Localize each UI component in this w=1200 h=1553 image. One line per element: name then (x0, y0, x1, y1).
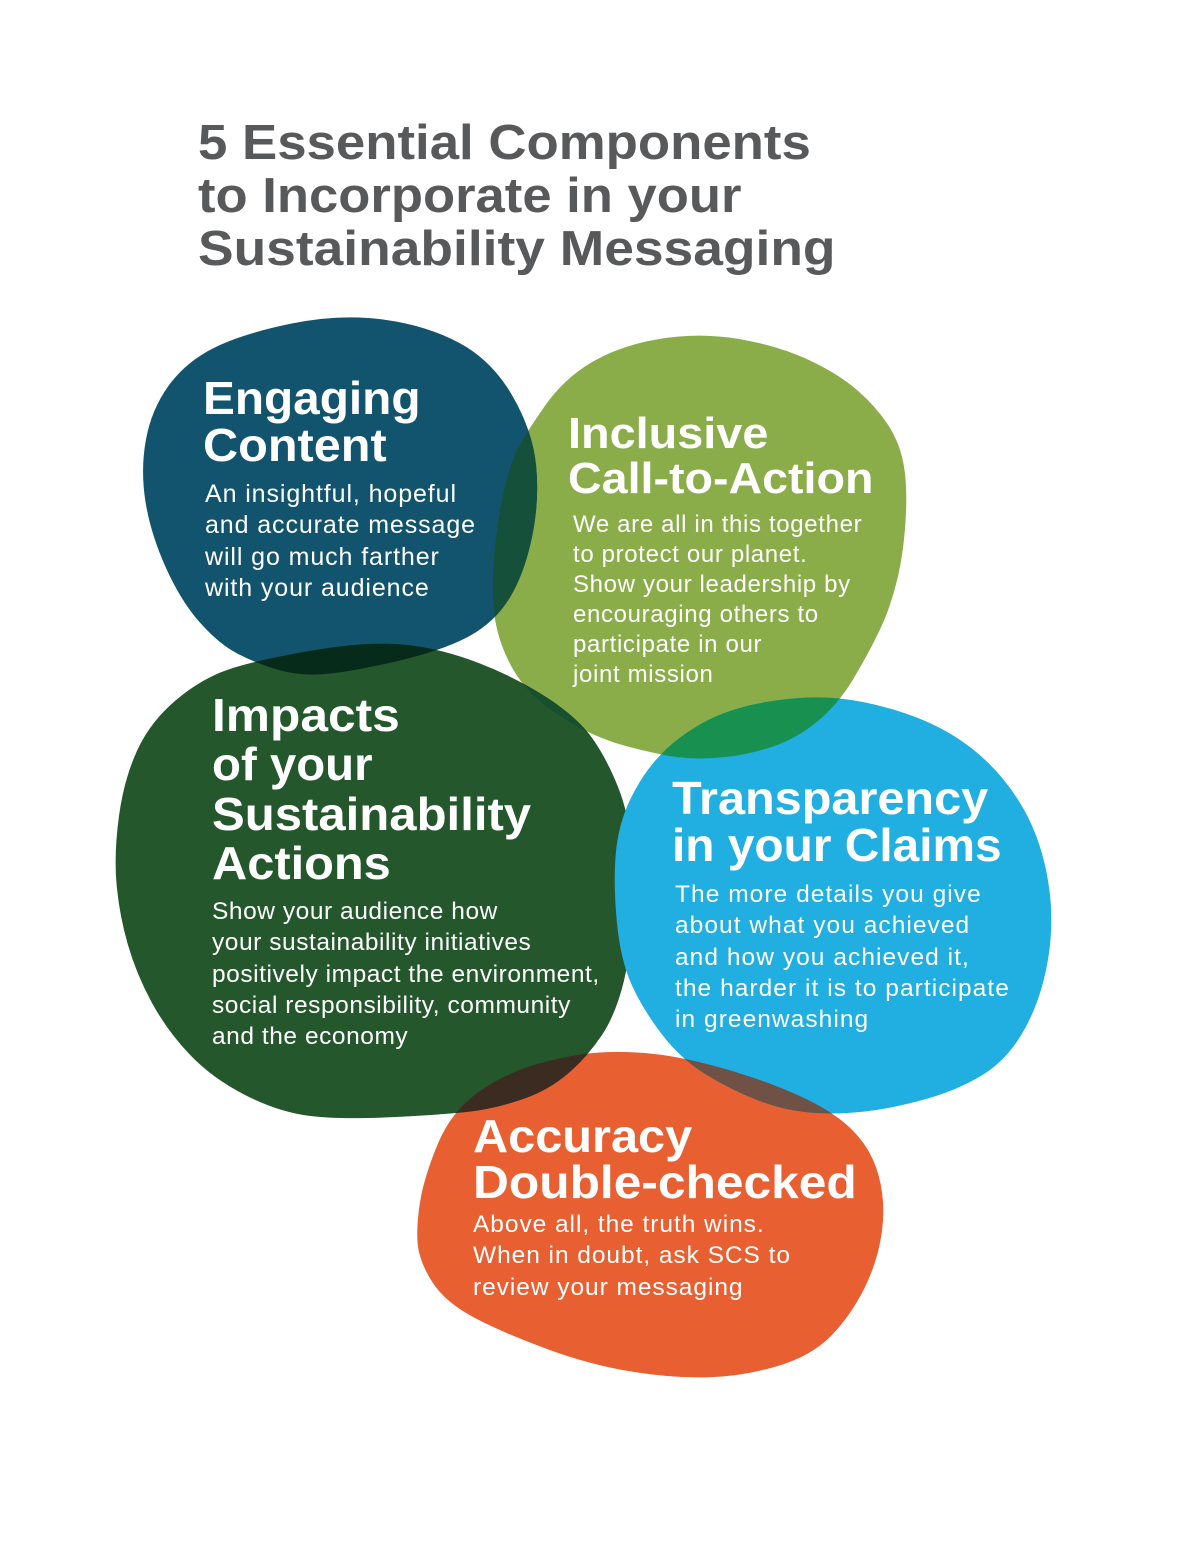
heading: transparency: Transparency (672, 772, 988, 824)
blob: accuracy (417, 1052, 883, 1377)
panel text: accuracy (473, 1110, 857, 1301)
heading: impacts: Actions (212, 837, 391, 889)
body: engaging content: An insightful, hopeful (205, 480, 457, 508)
body: inclusive call-to-action: We are all in this together (573, 511, 862, 538)
body: accuracy: Above all, the truth wins. (473, 1211, 765, 1238)
body: transparency: The more details you give (675, 881, 982, 908)
body: inclusive call-to-action (572, 511, 862, 688)
heading: accuracy: Accuracy (473, 1110, 692, 1162)
body: inclusive call-to-action: participate in our (573, 631, 762, 658)
body: inclusive call-to-action: Show your leadership by (573, 571, 851, 598)
overlap: inclusive and impacts (522, 683, 587, 732)
body: transparency: about what you achieved (675, 912, 970, 939)
heading: engaging content: Engaging (203, 372, 421, 424)
body: engaging content: with your audience (205, 574, 430, 602)
heading: engaging content: Content (203, 419, 387, 471)
title: to Incorporate in your (198, 168, 742, 223)
heading: inclusive call-to-action: Call-to-Action (568, 454, 873, 503)
overlap: inclusive and transparency (661, 697, 840, 758)
panel text: transparency (672, 772, 1010, 1033)
heading: transparency (672, 772, 1002, 871)
body: engaging content (205, 480, 476, 602)
heading: accuracy: Double-checked (473, 1156, 857, 1208)
body: inclusive call-to-action: encouraging others to (573, 601, 819, 628)
title: Sustainability Messaging (198, 221, 836, 276)
heading: inclusive call-to-action (568, 409, 873, 503)
body: inclusive call-to-action: to protect our planet. (573, 541, 807, 568)
blobs (116, 317, 1052, 1378)
body: transparency: and how you achieved it, (675, 944, 970, 971)
body: transparency: the harder it is to participate (675, 975, 1010, 1002)
body: impacts: social responsibility, community (212, 992, 571, 1019)
body: impacts: positively impact the environment, (212, 961, 600, 988)
heading: accuracy (473, 1110, 857, 1208)
body: accuracy (473, 1211, 791, 1301)
heading: impacts: Sustainability (212, 788, 531, 840)
panel text: impacts (212, 689, 600, 1050)
body: impacts: Show your audience how (212, 898, 498, 925)
body: transparency: in greenwashing (675, 1006, 869, 1033)
panel text: engaging content (203, 372, 476, 602)
body: engaging content: and accurate message (205, 511, 476, 539)
body: accuracy: When in doubt, ask SCS to (473, 1242, 791, 1269)
overlap: engaging and inclusive (492, 430, 538, 617)
blob: inclusive call-to-action (493, 336, 906, 758)
body: engaging content: will go much farther (205, 543, 440, 571)
body: transparency (675, 881, 1010, 1033)
heading: impacts: of your (212, 738, 373, 790)
body: accuracy: review your messaging (473, 1274, 744, 1301)
blob: transparency (615, 697, 1051, 1113)
panel text: inclusive call-to-action (568, 409, 873, 688)
heading: transparency: in your Claims (672, 819, 1002, 871)
heading: impacts: Impacts (212, 689, 400, 741)
title (198, 115, 836, 276)
overlap: transparency and accuracy (684, 1058, 832, 1114)
heading: inclusive call-to-action: Inclusive (568, 409, 768, 458)
heading: engaging content (203, 372, 421, 471)
body: impacts: your sustainability initiatives (212, 929, 531, 956)
overlap: engaging and impacts (255, 644, 436, 675)
body: impacts (212, 898, 600, 1050)
blob: engaging content (143, 317, 537, 675)
body: inclusive call-to-action: joint mission (573, 661, 714, 688)
title: 5 Essential Components (198, 115, 811, 170)
heading: impacts (212, 689, 531, 889)
overlap: impacts and accuracy (456, 1054, 588, 1113)
blob: impacts (116, 644, 633, 1118)
body: impacts: and the economy (212, 1023, 408, 1050)
